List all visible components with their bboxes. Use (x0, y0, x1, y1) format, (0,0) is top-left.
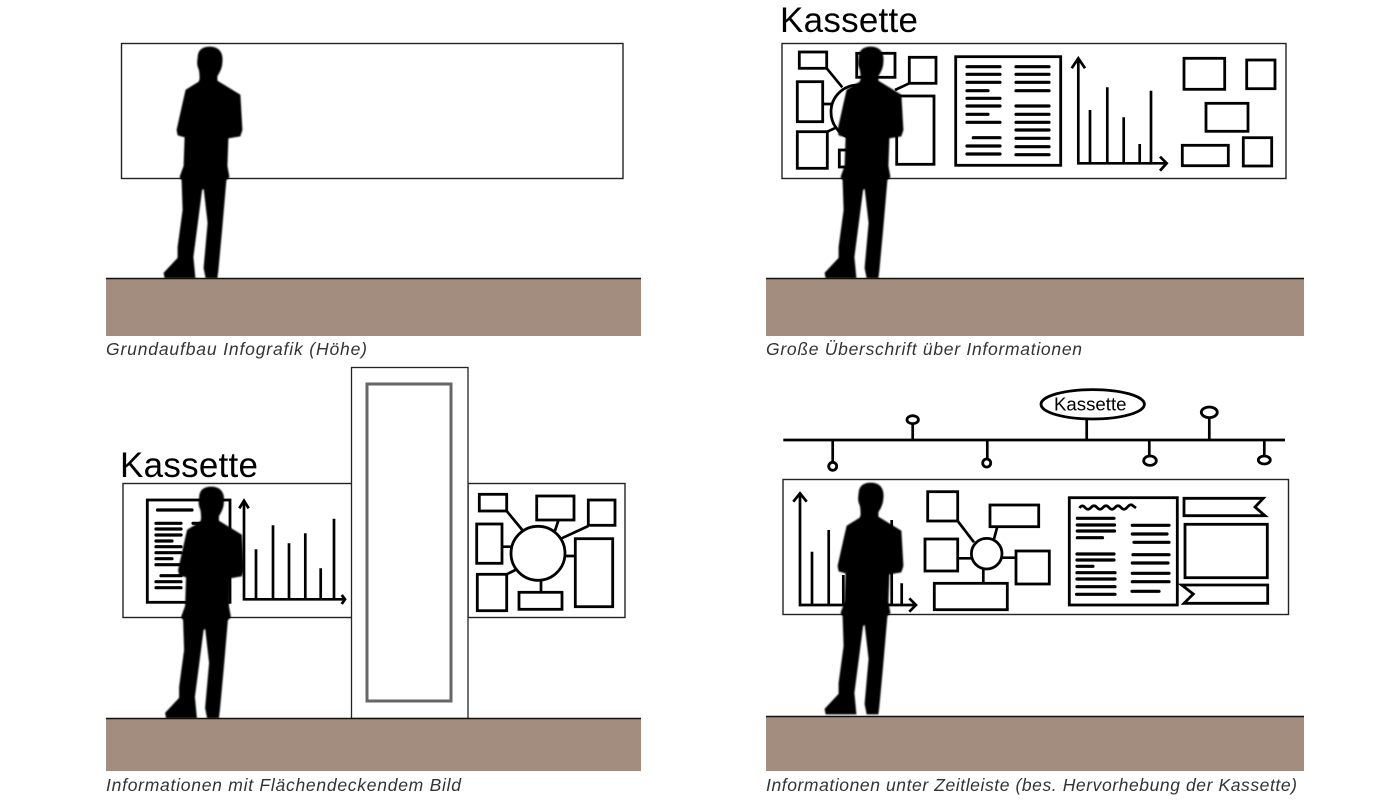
bar chart (1072, 58, 1167, 171)
panel: Grundaufbau Infografik (106, 44, 641, 359)
ground (106, 718, 641, 771)
person silhouette (166, 487, 244, 718)
heading: Kassette (120, 446, 258, 485)
panel: Zeitleiste (766, 390, 1304, 795)
text document (147, 500, 230, 602)
highlighted Kassette label: Kassette (1054, 394, 1126, 414)
ground (106, 278, 641, 336)
caption: Grundaufbau Infografik (Höhe) (106, 339, 367, 359)
mind map (925, 492, 1049, 610)
panel: Große Überschrift (766, 1, 1304, 359)
wall frame right (468, 484, 625, 618)
panel: Flächendeckendes Bild (106, 368, 641, 795)
ground (766, 716, 1304, 771)
ribbon and image blocks (1182, 498, 1268, 603)
wall frame (782, 44, 1286, 178)
person silhouette (825, 483, 903, 714)
person silhouette (825, 47, 903, 278)
mind map (797, 52, 936, 168)
caption: Informationen mit Flächendeckendem Bild (106, 775, 462, 795)
wall frame (783, 480, 1288, 614)
wall frame left (123, 484, 352, 618)
highlighted Kassette label (1041, 390, 1144, 419)
timeline (783, 390, 1285, 470)
person silhouette (164, 47, 242, 278)
mind map (477, 494, 615, 611)
bar chart (793, 493, 916, 612)
caption: Große Überschrift über Informationen (766, 339, 1082, 359)
bar chart (239, 501, 345, 604)
image boxes (1182, 58, 1275, 166)
tall image column (352, 368, 468, 718)
ground (766, 278, 1304, 336)
text document (1069, 498, 1177, 605)
wall frame (122, 44, 623, 178)
text document (956, 57, 1061, 165)
caption: Informationen unter Zeitleiste (bes. Hervorhebung der Kassette) (766, 775, 1297, 795)
heading: Kassette (780, 1, 918, 40)
